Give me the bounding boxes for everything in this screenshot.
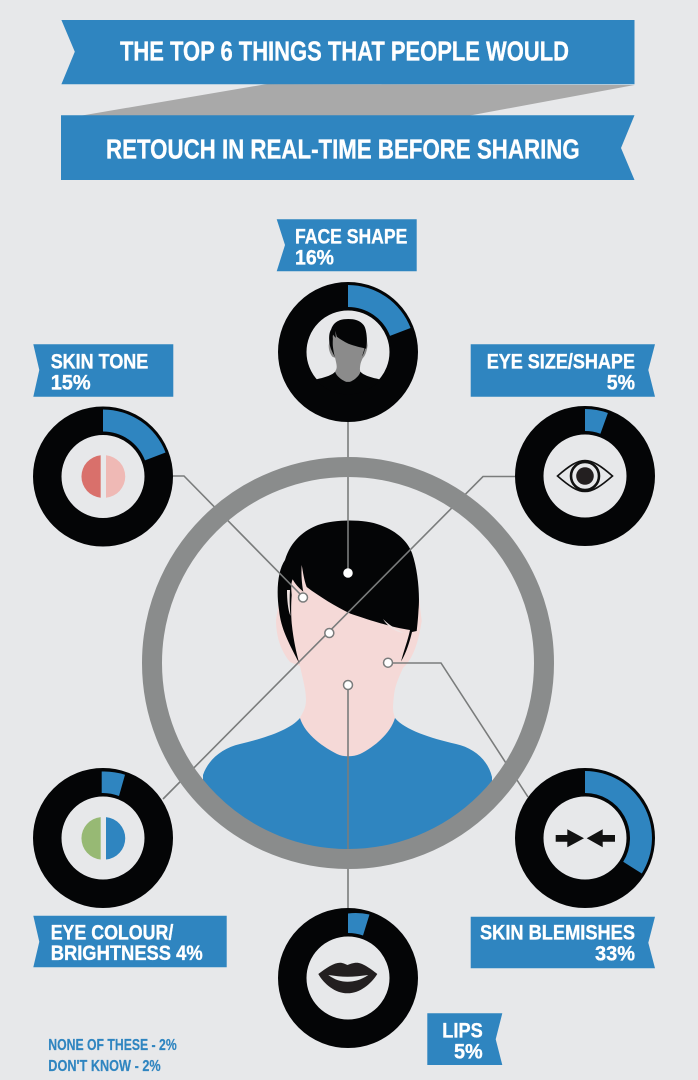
portrait skin: [276, 565, 422, 756]
donut: 4%: [47, 771, 159, 894]
portrait hair: [278, 520, 419, 664]
hair highlights: [287, 590, 404, 633]
heading line 1: THE TOP 6 THINGS THAT PEOPLE WOULD: [120, 35, 569, 66]
donut: 5%: [292, 913, 404, 1034]
dot: lips: [344, 680, 352, 690]
panel: skin tone: [33, 344, 173, 532]
label: lips: LIPS: [442, 1019, 483, 1042]
label: skin tone: 15%: [51, 371, 91, 394]
label: skin blemishes: [471, 917, 655, 968]
label: lips: [427, 1013, 502, 1065]
footnote: NONE OF THESE - 2%: [48, 1037, 177, 1054]
ribbon top: [61, 20, 634, 84]
label: eye colour and brightness: BRIGHTNESS 4%: [51, 942, 203, 965]
label: eye colour and brightness: EYE COLOUR/: [51, 921, 173, 944]
donut: 15%: [47, 410, 166, 532]
line: skin tone: [173, 476, 303, 597]
line: lips: [347, 685, 349, 908]
label: skin tone: [33, 344, 173, 397]
label: eye colour and brightness: [33, 916, 227, 967]
donut: 33%: [529, 771, 652, 894]
ribbon fold: [82, 84, 634, 116]
icon: head silhouette: [316, 319, 380, 394]
donut: 5%: [529, 409, 641, 532]
connector lines: [163, 421, 528, 908]
panel: lips: [292, 913, 502, 1065]
portrait body: [203, 718, 492, 849]
label: skin blemishes: 33%: [595, 943, 635, 966]
line: skin blemishes: [388, 663, 528, 797]
footnote: [48, 1037, 177, 1075]
label: face shape: [277, 219, 417, 271]
central portrait: [203, 520, 492, 870]
icon: eye colour halves: [81, 817, 125, 860]
donut: 16%: [292, 285, 411, 408]
line: eye size and eye colour: [163, 476, 515, 799]
dot: face shape: [344, 569, 352, 577]
panel: face shape: [277, 219, 417, 412]
connector dots: [298, 569, 392, 690]
label: face shape: FACE SHAPE: [295, 225, 407, 248]
heading line 2: RETOUCH IN REAL-TIME BEFORE SHARING: [106, 134, 580, 165]
panel: skin blemishes: [471, 771, 655, 968]
footnote: DON'T KNOW - 2%: [48, 1058, 161, 1075]
title banner: [61, 20, 634, 180]
icon: eye: [558, 460, 612, 492]
dot: eye: [325, 628, 334, 638]
dot: skin blemishes: [384, 658, 392, 667]
label: skin tone: SKIN TONE: [51, 350, 148, 373]
label: eye size and shape: [471, 344, 655, 397]
main grey ring: [152, 467, 544, 859]
icon: arrows pointing inward: [556, 829, 615, 847]
icon: skin tone halves: [81, 455, 125, 498]
label: eye size and shape: EYE SIZE/SHAPE: [487, 350, 635, 373]
label: face shape: 16%: [295, 246, 334, 269]
icon: lips: [318, 963, 377, 993]
panel: eye size and shape: [471, 344, 655, 532]
label: eye size and shape: 5%: [607, 371, 635, 394]
label: lips: 5%: [454, 1040, 483, 1063]
line: face shape: [347, 421, 349, 573]
panel: eye colour and brightness: [33, 771, 227, 967]
label: skin blemishes: SKIN BLEMISHES: [480, 921, 635, 944]
ribbon bottom: [61, 115, 634, 180]
dot: skin tone: [298, 593, 308, 602]
